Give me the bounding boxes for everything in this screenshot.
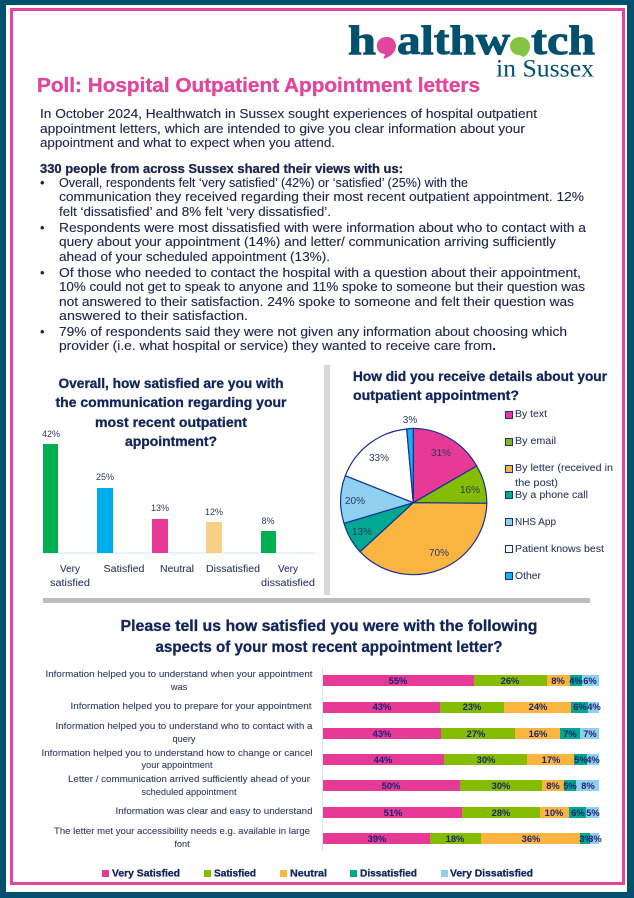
stacked bar values: 51% (384, 807, 403, 818)
logo: Healthwatch in Sussex: tch (531, 17, 595, 63)
chart heading: appointment? (125, 434, 217, 449)
stacked bar values: 5% (586, 807, 600, 818)
bar category labels: Dissatisfied (206, 564, 260, 575)
stacked bar values: 5% (563, 780, 577, 791)
stacked bar values: 8% (551, 675, 565, 686)
stacked bar values: 30% (492, 780, 511, 791)
key findings: • (40, 324, 45, 339)
stacked chart legend: Dissatisfied (360, 868, 417, 880)
stacked bar values: 36% (522, 833, 541, 844)
stacked chart legend: Satisfied (214, 868, 256, 880)
bar values: 25% (96, 472, 114, 482)
stacked bar values: 55% (389, 675, 408, 686)
stacked bar values: 26% (501, 675, 520, 686)
chart heading: most recent outpatient (95, 415, 247, 430)
chart heading (120, 618, 538, 656)
panel: overall satisfaction bar chart (42, 376, 315, 589)
key findings (40, 161, 587, 353)
stacked bar values: 43% (373, 701, 392, 712)
chart heading (353, 369, 608, 403)
chart heading: Overall, how satisfied are you with (58, 376, 284, 391)
stacked bar values: 8% (546, 780, 560, 791)
stacked bar values: 18% (446, 833, 465, 844)
stacked bar values: 4% (586, 754, 600, 765)
stacked bar values: 23% (463, 701, 482, 712)
pie legend: By letter (received in (515, 463, 613, 474)
stacked bar values: 6% (583, 675, 597, 686)
stacked bar values (368, 675, 602, 844)
logo: Healthwatch in Sussex: h (348, 17, 376, 63)
key findings: Respondents were most dissatisfied with were information about who to contact with a (59, 220, 587, 235)
axis (322, 667, 324, 851)
row labels: your appointment (142, 760, 213, 770)
pie legend: the post) (515, 478, 558, 489)
pie values: 3% (403, 415, 417, 426)
logo: Healthwatch in Sussex: in Sussex (496, 56, 595, 83)
intro text (40, 106, 537, 150)
bar category labels: Neutral (160, 564, 194, 575)
stacked chart legend: Very Dissatisfied (450, 868, 533, 880)
row labels: Information helped you to prepare for your appointment (70, 701, 312, 711)
title: Poll: Hospital Outpatient Appointment letters (37, 75, 480, 97)
row labels: Information was clear and easy to understand (116, 806, 312, 816)
intro text: appointment letters, which are intended to give you clear information about your (40, 121, 526, 136)
key findings: 330 people from across Sussex shared their views with us: (40, 161, 403, 176)
bar values (42, 429, 275, 526)
pie values: 31% (431, 448, 451, 459)
pie legend: NHS App (515, 517, 556, 528)
logo: Healthwatch in Sussex (348, 17, 595, 83)
bar values: 42% (42, 429, 60, 439)
bars (43, 444, 315, 553)
panel dividers (43, 365, 590, 603)
stacked bar values: 28% (492, 807, 511, 818)
row labels: font (174, 839, 190, 849)
pie legend (506, 409, 613, 582)
stacked bar values: 30% (477, 754, 496, 765)
panel: how details were received pie chart (341, 369, 613, 582)
pie values: 70% (429, 548, 449, 559)
stacked bar values: 7% (583, 728, 597, 739)
bar category labels: Very (278, 564, 298, 575)
pie (341, 428, 487, 575)
stacked bar values: 5% (574, 754, 588, 765)
bar category labels: satisfied (50, 578, 90, 589)
chart heading: the communication regarding your (56, 395, 287, 410)
row labels: query (173, 734, 196, 744)
stacked chart legend: Very Satisfied (112, 868, 180, 880)
stacked bar values: 44% (374, 754, 393, 765)
key findings: communication they received regarding their most recent outpatient appointment. 12% (59, 189, 584, 204)
stacked bar values: 4% (569, 675, 583, 686)
key findings: 10% could not get to speak to anyone and 11% spoke to someone but their question was (59, 279, 586, 294)
row labels: The letter met your accessibility needs e.g. available in large (54, 826, 310, 836)
pie legend: Other (515, 571, 542, 582)
panel: letter aspects stacked bar chart (42, 618, 602, 880)
pie legend: By text (515, 409, 547, 420)
stacked bar values: 16% (529, 728, 548, 739)
key findings: 79% of respondents said they were not given any information about choosing which (59, 324, 567, 339)
stacked bar values: 7% (563, 728, 577, 739)
bar category labels: Satisfied (104, 564, 144, 575)
stacked bars (323, 675, 599, 844)
key findings: not answered to their satisfaction. 24% spoke to someone and felt their question was (59, 294, 575, 309)
stacked bar values: 6% (573, 701, 587, 712)
pie values: 33% (369, 453, 389, 464)
stacked bar values: 17% (542, 754, 561, 765)
bar category labels: dissatisfied (261, 578, 315, 589)
chart heading: outpatient appointment? (353, 388, 519, 403)
row labels: Information helped you to understand who to contact with a (56, 721, 313, 731)
key findings: answered to their satisfaction. (59, 308, 248, 323)
pie values (345, 415, 480, 559)
bar values: 12% (205, 507, 223, 517)
key findings: Overall, respondents felt ‘very satisfied’ (42%) or ‘satisfied’ (25%) with the (59, 175, 468, 190)
row labels (42, 669, 313, 849)
row labels: Letter / communication arrived sufficiently ahead of your (68, 774, 310, 784)
stacked bar values: 43% (373, 728, 392, 739)
intro text: appointment and what to expect when you attend. (40, 135, 335, 150)
stacked bar values: 3% (579, 833, 593, 844)
stacked bar values: 4% (587, 701, 601, 712)
intro text: In October 2024, Healthwatch in Sussex sought experiences of hospital outpatient (40, 106, 537, 121)
pie values: 16% (460, 485, 480, 496)
chart heading: aspects of your most recent appointment letter? (156, 639, 502, 656)
chart heading (56, 376, 287, 449)
stacked bar values: 50% (382, 780, 401, 791)
key findings: query about your appointment (14%) and letter/ communication arriving sufficiently (59, 234, 557, 249)
key findings: • (40, 175, 45, 190)
stacked bar values: 10% (545, 807, 564, 818)
pie values: 13% (352, 527, 372, 538)
stacked bar values: 3% (588, 833, 602, 844)
key findings: Of those who needed to contact the hospital with a question about their appointment, (59, 265, 581, 280)
key findings: felt ‘dissatisfied’ and 8% felt ‘very dissatisfied’. (59, 204, 331, 219)
pie legend: Patient knows best (515, 544, 604, 555)
pie legend: By a phone call (515, 490, 588, 501)
pie legend: By email (515, 436, 556, 447)
stacked bar values: 8% (581, 780, 595, 791)
row labels: Information helped you to understand when your appointment (46, 669, 313, 679)
key findings: provider (i.e. what hospital or service) they wanted to receive care from . (59, 338, 496, 353)
stacked bar values: 39% (368, 833, 387, 844)
key findings: • (40, 220, 45, 235)
stacked chart legend (102, 868, 533, 880)
bar category labels: Very (60, 564, 80, 575)
stacked bar values: 27% (467, 728, 486, 739)
chart heading: How did you receive details about your (353, 369, 608, 384)
row labels: scheduled appointment (141, 787, 237, 797)
row labels: was (170, 682, 188, 692)
bar values: 13% (151, 503, 169, 513)
row labels: Information helped you to understand how to change or cancel (42, 748, 312, 758)
bar category labels (50, 564, 315, 589)
stacked bar values: 24% (529, 701, 548, 712)
stacked chart legend: Neutral (290, 868, 327, 880)
key findings: ahead of your scheduled appointment (13%). (59, 249, 330, 264)
logo: Healthwatch in Sussex: althw (397, 17, 510, 63)
pie values: 20% (345, 496, 365, 507)
key findings: • (40, 265, 45, 280)
stacked bar values: 6% (571, 807, 585, 818)
chart heading: Please tell us how satisfied you were with the following (120, 618, 538, 635)
bar values: 8% (261, 516, 275, 526)
